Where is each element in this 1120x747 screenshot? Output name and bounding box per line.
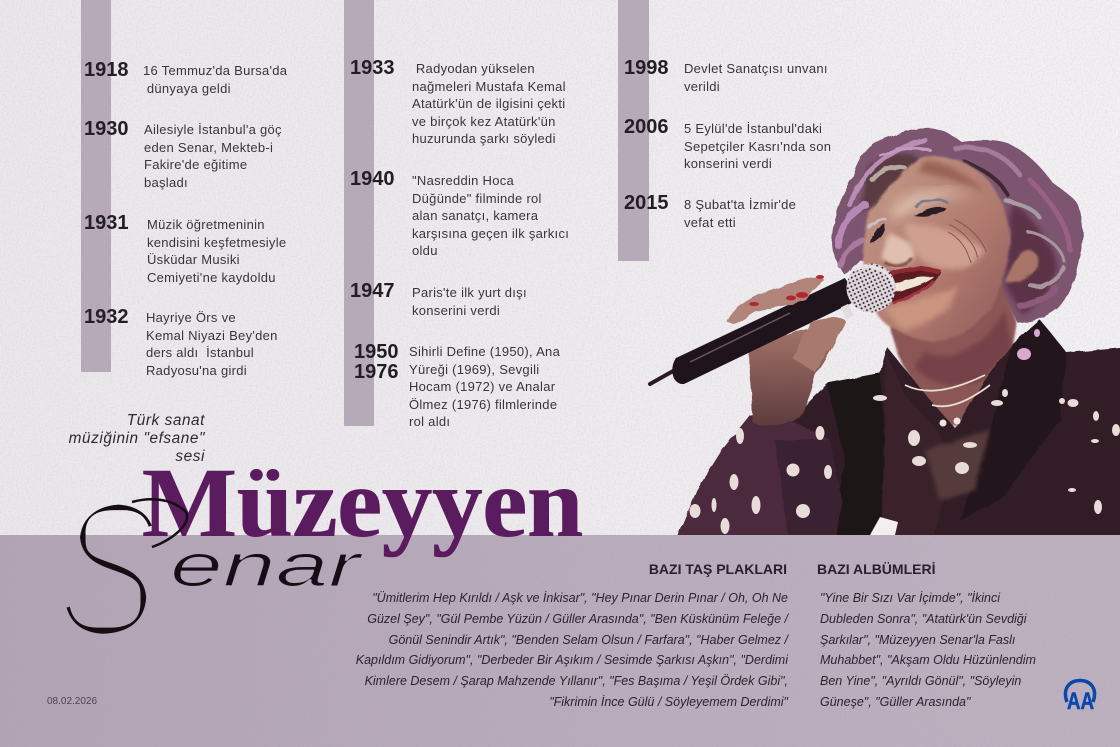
Senar script: S <box>56 461 160 678</box>
1950 1976 text: Ölmez (1976) filmlerinde <box>409 397 557 412</box>
1931 text: kendisini keşfetmesiyle <box>147 235 286 250</box>
2015 text: vefat etti <box>684 215 736 230</box>
subtitle: Türk sanat <box>127 412 205 429</box>
1940 text: alan sanatçı, kamera <box>412 208 538 223</box>
nails <box>749 275 824 306</box>
1932 text <box>146 310 278 378</box>
hair strands <box>838 140 1070 305</box>
1932 text: Hayriye Örs ve <box>146 310 236 325</box>
1930 text: başladı <box>144 175 188 190</box>
1933 text: Radyodan yükselen <box>416 61 535 76</box>
face wrinkles <box>948 220 986 262</box>
1930 text: Ailesiyle İstanbul'a göç <box>144 122 282 137</box>
1930: 1930 <box>84 118 128 140</box>
blouse body <box>672 320 1120 550</box>
fingers over mic <box>727 277 846 372</box>
1940: 1940 <box>350 168 394 190</box>
1950 1976 text: rol aldı <box>409 414 450 429</box>
mouth <box>890 268 941 302</box>
1930 text: eden Senar, Mekteb-i <box>144 140 273 155</box>
1950 1976 text: Sihirli Define (1950), Ana <box>409 344 560 359</box>
1918 text <box>143 63 287 96</box>
1933 text: nağmeleri Mustafa Kemal <box>412 79 566 94</box>
1931: 1931 <box>84 212 128 234</box>
albums list: Şarkılar", "Müzeyyen Senar'la Faslı <box>820 633 1015 647</box>
1931 text: Cemiyeti'ne kaydoldu <box>147 270 276 285</box>
1940 text <box>412 173 569 258</box>
1947 text: Paris'te ilk yurt dışı <box>412 285 527 300</box>
1931 text: Müzik öğretmeninin <box>147 217 265 232</box>
1918 text: 16 Temmuz'da Bursa'da <box>143 63 287 78</box>
1950 1976 text: Yüreği (1969), Sevgili <box>409 362 539 377</box>
1940 text: Düğünde" filminde rol <box>412 191 542 206</box>
albums list: "Yine Bir Sızı Var İçimde", "İkinci <box>820 591 1000 605</box>
1940 text: karşısına geçen ilk şarkıcı <box>412 226 569 241</box>
bottom band <box>0 535 1120 747</box>
2015 text: 8 Şubat'ta İzmir'de <box>684 197 796 212</box>
1947 text: konserini verdi <box>412 303 500 318</box>
1918: 1918 <box>84 59 128 81</box>
1932 text: ders aldı İstanbul <box>146 345 254 360</box>
heading: stone records: BAZI TAŞ PLAKLARI <box>649 561 787 577</box>
1931 text <box>147 217 286 285</box>
microphone <box>650 264 896 384</box>
date: 08.02.2026 <box>47 696 97 707</box>
1932: 1932 <box>84 306 128 328</box>
stone records list: "Ümitlerim Hep Kırıldı / Aşk ve İnkisar", "Hey Pınar Derin Pınar / Oh, Oh Ne <box>372 591 788 605</box>
necklace <box>905 375 990 406</box>
1998 text: Devlet Sanatçısı unvanı <box>684 61 828 76</box>
timeline bars <box>81 0 649 426</box>
1918 text: dünyaya geldi <box>147 81 231 96</box>
1998: 1998 <box>624 57 668 79</box>
1950 1976: 1976 <box>354 361 398 383</box>
subtitle: müziğinin "efsane" <box>69 430 205 447</box>
1940 text: oldu <box>412 243 438 258</box>
2006 text: konserini verdi <box>684 156 772 171</box>
stone records list <box>356 591 789 709</box>
hand <box>748 320 845 425</box>
albums list: Muhabbet", "Akşam Oldu Hüzünlendim <box>820 653 1036 667</box>
2006: 2006 <box>624 116 668 138</box>
1931 text: Üsküdar Musiki <box>147 252 240 267</box>
timeline column 2 <box>350 57 569 429</box>
stone records list: Gönül Senindir Artık", "Benden Selam Olsun / Farfara", "Haber Gelmez / <box>389 633 788 647</box>
1950 1976: 1950 <box>354 341 398 363</box>
1933 text: huzurunda şarkı söyledi <box>412 131 556 146</box>
subtitle: sesi <box>175 448 205 465</box>
timeline column 1 <box>84 59 287 378</box>
stone records list: Kimlere Desem / Şarap Mahzende Yıllanır", "Fes Başıma / Yeşil Ördek Gibi", <box>365 674 788 688</box>
hair <box>832 128 1083 323</box>
2006 text: 5 Eylül'de İstanbul'daki <box>684 121 822 136</box>
stone records list: Güzel Şey", "Gül Pembe Yüzün / Güller Arasında", "Ben Küskünüm Feleğe / <box>367 612 788 626</box>
eyes and nose <box>914 207 946 217</box>
1998 text: verildi <box>684 79 720 94</box>
1933: 1933 <box>350 57 394 79</box>
1947: 1947 <box>350 280 394 302</box>
Müzeyyen: Müzeyyen <box>142 447 583 558</box>
face <box>863 156 1010 341</box>
albums list: Dubleden Sonra", "Atatürk'ün Sevdiği <box>820 612 1027 626</box>
stone records list: "Fikrimin İnce Gülü / Söyleyemem Derdimi" <box>549 695 788 709</box>
ear <box>1005 250 1039 283</box>
subtitle <box>68 412 205 465</box>
heading: albums: BAZI ALBÜMLERİ <box>817 561 935 577</box>
1950 1976 text: Hocam (1972) ve Analar <box>409 379 555 394</box>
1998 text <box>684 61 828 94</box>
1947 text <box>412 285 527 318</box>
1933 text <box>412 61 566 146</box>
2015 text <box>684 197 796 230</box>
1933 text: Atatürk'ün de ilgisini çekti <box>412 96 565 111</box>
1930 text <box>144 122 282 190</box>
1932 text: Radyosu'na girdi <box>146 363 247 378</box>
albums list: Ben Yine", "Ayrıldı Gönül", "Söyleyin <box>820 674 1021 688</box>
Senar script <box>56 461 363 678</box>
albums list: Güneşe", "Güller Arasında" <box>820 695 970 709</box>
logo: AA: AA <box>1067 688 1094 715</box>
1940 text: "Nasreddin Hoca <box>412 173 514 188</box>
2006 text: Sepetçiler Kasrı'nda son <box>684 139 831 154</box>
stone records list: Kapıldım Gidiyorum", "Derbeder Bir Aşıkım / Sesimde Şarkısı Aşkın", "Derdimi <box>356 653 788 667</box>
1933 text: ve birçok kez Atatürk'ün <box>412 114 556 129</box>
Senar script: enar <box>170 532 363 599</box>
albums list <box>820 591 1036 709</box>
sleeve shading <box>774 439 843 535</box>
2006 text <box>684 121 831 171</box>
2015: 2015 <box>624 192 668 214</box>
portrait illustration of the singer with microphone <box>648 128 1120 535</box>
timeline column 3 <box>624 57 831 230</box>
polka dots <box>690 389 1120 535</box>
1950 1976 text <box>409 344 560 429</box>
1930 text: Fakire'de eğitime <box>144 157 247 172</box>
neck and chest <box>890 280 1017 425</box>
1932 text: Kemal Niyazi Bey'den <box>146 328 278 343</box>
1950 1976 <box>354 341 398 383</box>
